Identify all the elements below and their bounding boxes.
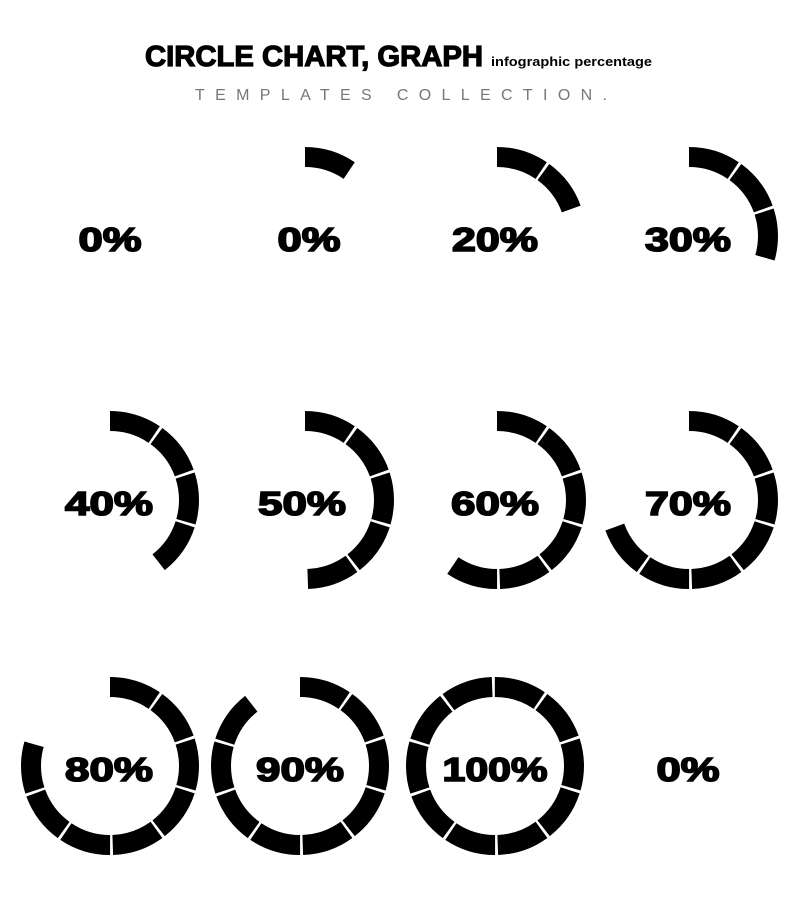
chart: 50%: 50%	[258, 485, 346, 522]
chart: 70%	[610, 421, 768, 579]
chart: 0% final: 0%	[656, 751, 720, 788]
chart: 50%	[226, 421, 384, 579]
chart: 70%: 70%	[645, 485, 731, 522]
chart: 80%	[31, 687, 189, 845]
chart: 90%: 90%	[256, 751, 344, 788]
chart: 40%	[31, 421, 189, 579]
chart: 100%: 100%	[442, 751, 548, 788]
title: CIRCLE CHART, GRAPH	[145, 41, 483, 73]
chart: 30%: 30%	[645, 221, 731, 258]
chart: 100%	[416, 687, 574, 845]
chart: 80%: 80%	[65, 751, 153, 788]
title	[145, 41, 652, 73]
chart: 20%	[418, 157, 576, 315]
chart: 90%	[221, 687, 379, 845]
chart: 20%: 20%	[452, 221, 538, 258]
chart: 30%	[610, 157, 768, 315]
chart: 60%: 60%	[451, 485, 539, 522]
chart: 0% one segment: 0%	[278, 221, 340, 258]
chart: 0% (empty): 0%	[78, 221, 142, 258]
subtitle: TEMPLATES COLLECTION.	[195, 87, 607, 104]
chart: 0% one segment	[226, 157, 384, 315]
title: infographic percentage	[491, 54, 652, 69]
chart: 40%: 40%	[65, 485, 153, 522]
chart: 60%	[418, 421, 576, 579]
